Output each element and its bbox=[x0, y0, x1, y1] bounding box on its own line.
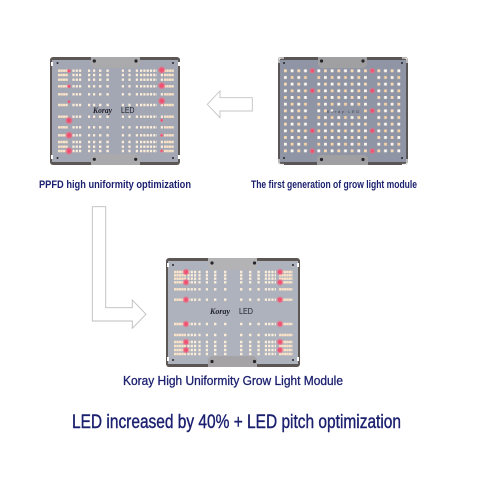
arrow: down then right bbox=[92, 207, 146, 328]
panel: Koray high uniformity module bbox=[166, 258, 300, 367]
LED rows bbox=[58, 71, 174, 151]
LED rows bbox=[174, 272, 292, 354]
module board bbox=[52, 60, 178, 162]
module frame bbox=[50, 57, 180, 165]
module logo: LED bbox=[121, 106, 135, 115]
module logo: Koray bbox=[209, 306, 230, 316]
module frame bbox=[166, 258, 300, 367]
headline: LED increased by 40% + LED pitch optimization bbox=[72, 412, 401, 433]
side notches bbox=[51, 62, 180, 159]
red LEDs bbox=[309, 68, 375, 154]
caption: Koray module: Koray High Uniformity Grow Light Module bbox=[123, 373, 343, 388]
center marking: Koray LED bbox=[327, 110, 359, 114]
module logo: LED bbox=[239, 306, 253, 316]
side notches bbox=[167, 263, 299, 361]
panel: first generation module bbox=[278, 57, 408, 165]
panel: PPFD optimized module bbox=[50, 57, 180, 165]
module logo: Koray bbox=[92, 106, 112, 115]
top bracket bbox=[318, 57, 367, 68]
caption: first generation: The first generation of grow light module bbox=[251, 179, 417, 191]
mounting screws bbox=[283, 59, 403, 161]
bottom bracket bbox=[208, 356, 257, 367]
top bracket bbox=[91, 57, 140, 68]
module frame bbox=[278, 57, 408, 165]
caption: PPFD: PPFD high uniformity optimization bbox=[39, 179, 191, 191]
arrow: left bbox=[207, 91, 252, 118]
red LEDs bbox=[182, 268, 284, 354]
LED grid bbox=[283, 68, 403, 154]
top bracket bbox=[208, 258, 257, 270]
module logo bbox=[92, 106, 135, 115]
bottom bracket bbox=[317, 155, 368, 165]
module board bbox=[168, 261, 298, 364]
module board bbox=[280, 60, 406, 162]
red LEDs bbox=[65, 66, 166, 155]
mounting screws bbox=[56, 59, 174, 161]
module logo bbox=[209, 306, 253, 316]
bottom bracket bbox=[91, 154, 140, 165]
mounting screws bbox=[172, 261, 294, 363]
white corner clips bbox=[279, 58, 407, 164]
component strips bbox=[310, 74, 376, 147]
